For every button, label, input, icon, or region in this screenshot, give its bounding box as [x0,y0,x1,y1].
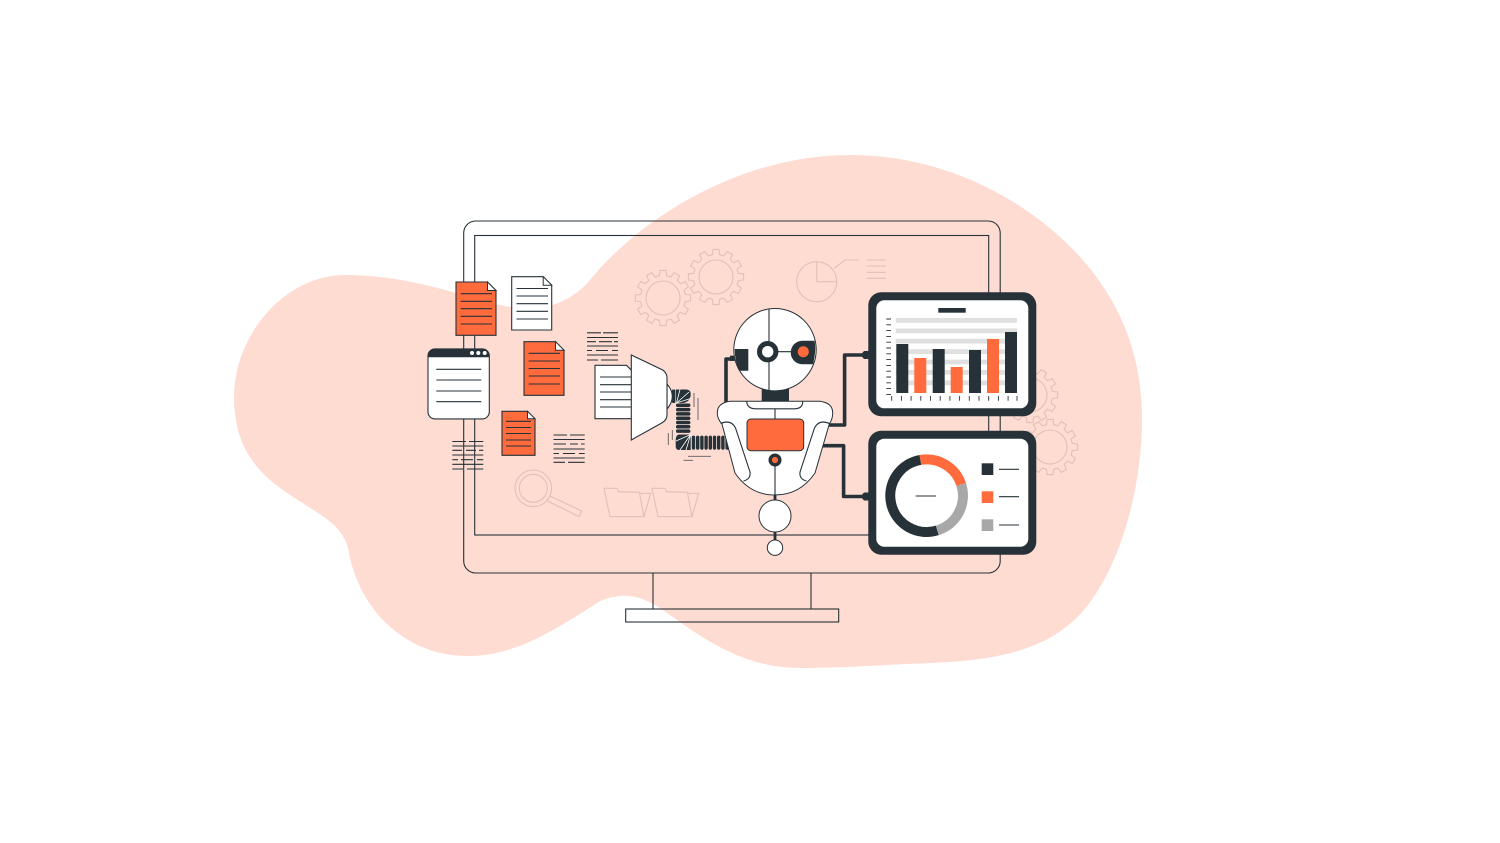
magnifier sketch [515,470,582,517]
donut [890,459,963,532]
axis ticks [886,319,1017,401]
small ball [767,540,783,555]
torso [717,401,833,495]
ear [735,349,748,371]
gear upper [688,249,744,305]
browser window [428,349,489,419]
grid bands [896,318,1017,385]
gear right upper [1002,367,1058,423]
panel: donut chart [860,431,1036,555]
left arm [721,422,750,481]
panel: bar chart [860,292,1036,416]
text lines cluster right [554,435,585,462]
gear left [635,270,691,326]
left eye [760,344,776,360]
legend [982,463,1019,531]
right arm [800,422,829,481]
monitor [464,221,1000,622]
motion lines [668,393,711,460]
flexible hose [668,390,727,460]
navel [770,455,780,465]
document entering funnel [595,365,635,419]
orange document 3 [502,411,535,455]
chart title bar [938,308,966,313]
folder sketches [604,488,699,517]
pie chart sketch [797,260,886,302]
lower ball [759,500,791,532]
white document [512,277,552,330]
gear right lower [1022,419,1078,475]
text lines cluster top [587,333,618,360]
orange document 1 [456,282,496,335]
neck [762,388,789,402]
background blob [234,155,1142,668]
cables [726,355,864,541]
text lines cluster left [452,442,483,469]
bars [896,332,1017,393]
orange document 2 [524,342,564,395]
right eye [791,341,815,364]
robot [717,308,833,555]
background gears, pie and magnifier motif [515,249,1078,517]
chest panel [747,419,804,451]
funnel [631,355,672,440]
head [734,308,816,391]
